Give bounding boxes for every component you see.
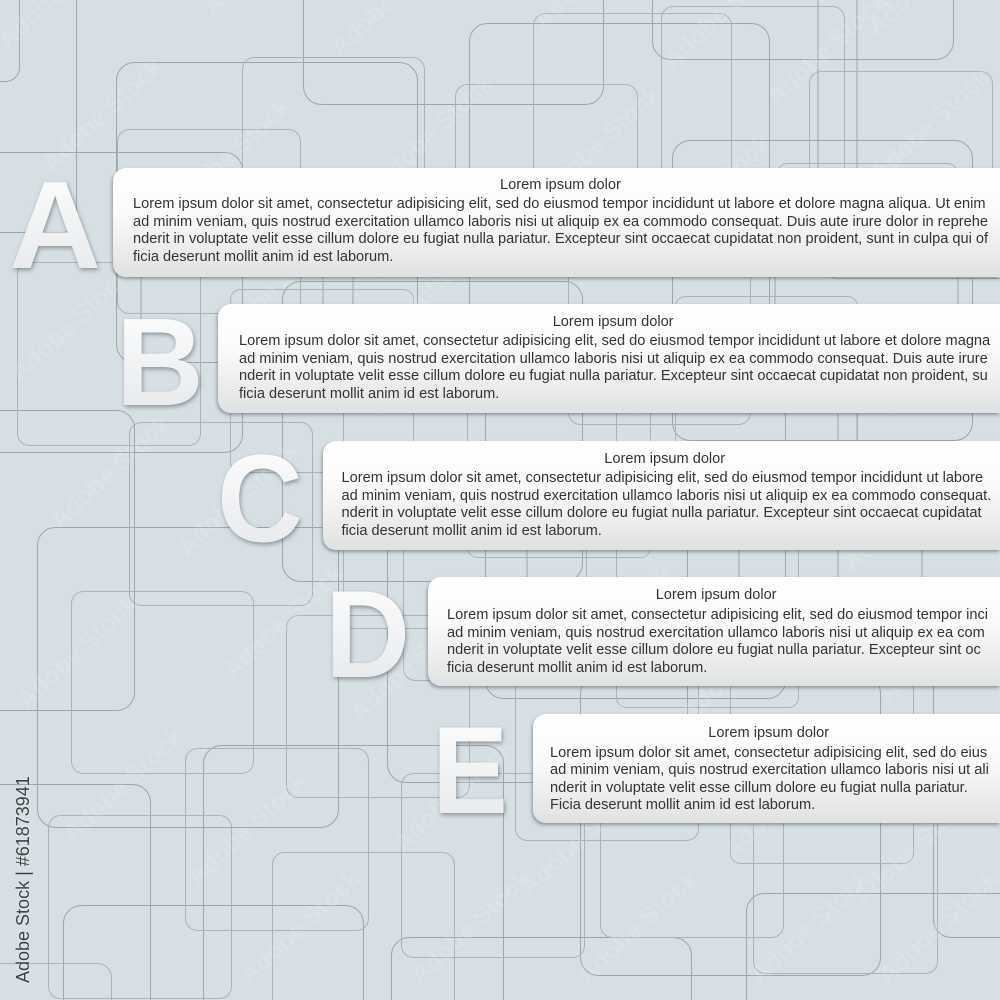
stock watermarks: Adobe Stock	[548, 563, 679, 687]
heading A: Lorem ipsum dolor	[500, 176, 621, 192]
text block A: Lorem ipsum dolor sit amet, consectetur adipisicing elit, sed do eiusmod tempor incididunt ut labore et dolore magna aliqua. Ut enim ad minim veniam, quis nostrud exercitation ullamco laboris nisi ut aliquip ex ea commodo consequat. Duis aute irure dolor in reprehe nderit in voluptate velit esse cillum dolore eu fugiat nulla pariatur. Excepteur sint occaecat cupidatat non proident, sunt in culpa qui of ficia deserunt mollit anim id est laborum.	[133, 196, 988, 265]
stock watermarks: Adobe Stock	[385, 210, 516, 334]
stock watermarks: Adobe Stock	[37, 53, 168, 177]
letter C: C	[217, 429, 303, 568]
panel: D	[428, 577, 1000, 686]
stock watermarks: Adobe Stock	[405, 865, 536, 989]
stock watermarks: Adobe Stock	[838, 453, 969, 577]
stock watermarks: Adobe Stock	[172, 437, 303, 561]
stock watermarks: Adobe Stock	[235, 865, 366, 989]
stock watermarks: Adobe Stock	[218, 560, 349, 684]
text block C: Lorem ipsum dolor sit amet, consectetur adipisicing elit, sed do eiusmod tempor incididunt ut labore ad minim veniam, quis nostrud exercitation ullamco laboris nisi ut aliquip ex ea commodo consequat. nderit in voluptate velit esse cillum dolore eu fugiat nulla pariatur. Excepteur sint occaecat cupidatat ficia deserunt mollit anim id est laborum.	[342, 470, 991, 539]
stock watermarks: Adobe Stock	[388, 733, 519, 857]
panel: A	[113, 168, 1000, 277]
stock watermarks: Adobe Stock	[12, 590, 143, 714]
panel: B	[218, 304, 1000, 413]
panel: C	[323, 441, 1000, 550]
heading E: Lorem ipsum dolor	[708, 725, 829, 741]
stock image id: Adobe Stock | #61873941	[13, 776, 33, 983]
stock watermarks: Adobe Stock	[345, 603, 476, 727]
letter E: E	[432, 702, 508, 840]
stock watermarks: Adobe Stock	[208, 227, 339, 351]
stock watermarks: Adobe Stock	[865, 63, 996, 187]
stock watermarks: Adobe Stock	[368, 70, 499, 194]
stock watermarks: Adobe Stock	[745, 865, 876, 989]
letter B: B	[116, 294, 204, 432]
stock watermarks: Adobe Stock	[675, 603, 806, 727]
heading D: Lorem ipsum dolor	[656, 587, 777, 603]
stock watermarks: Adobe Stock	[848, 787, 979, 911]
stock watermarks: Adobe Stock	[645, 130, 776, 254]
stock watermarks: Adobe Stock	[873, 865, 1000, 989]
stock watermarks: Adobe Stock	[515, 777, 646, 901]
heading C: Lorem ipsum dolor	[604, 451, 725, 467]
text block B: Lorem ipsum dolor sit amet, consectetur adipisicing elit, sed do eiusmod tempor incididunt ut labore et dolore magna ad minim veniam, quis nostrud exercitation ullamco laboris nisi ut aliquip ex ea commodo consequat. Duis aute irure nderit in voluptate velit esse cillum dolore eu fugiat nulla pariatur. Excepteur sint occaecat cupidatat non proident, su ficia deserunt mollit anim id est laborum.	[239, 333, 990, 402]
stock watermarks: Adobe Stock	[535, 80, 666, 204]
stock watermarks: Adobe Stock	[45, 410, 176, 534]
panel: E	[533, 714, 1000, 823]
stock watermarks: Adobe Stock	[165, 93, 296, 217]
stock watermarks: Adobe Stock	[58, 723, 189, 847]
letter A: A	[9, 156, 101, 295]
stock watermarks: Adobe Stock	[572, 865, 703, 989]
heading B: Lorem ipsum dolor	[553, 314, 674, 330]
stock watermarks: Adobe Stock	[718, 740, 849, 864]
stock watermarks: Adobe Stock	[5, 263, 136, 387]
stock watermarks: Adobe Stock	[873, 583, 1000, 707]
letter D: D	[325, 565, 410, 704]
text block D: Lorem ipsum dolor sit amet, consectetur adipisicing elit, sed do eiusmod tempor inci ad minim veniam, quis nostrud exercitation ullamco laboris nisi ut aliquip ex ea com nderit in voluptate velit esse cillum dolore eu fugiat nulla pariatur. Excepteur sint oc ficia deserunt mollit anim id est laborum.	[447, 607, 988, 676]
text block E: Lorem ipsum dolor sit amet, consectetur adipisicing elit, sed do eius ad minim veniam, quis nostrud exercitation ullamco laboris nisi ut ali nderit in voluptate velit esse cillum dolore eu fugiat nulla pariatur. Ficia deserunt mollit anim id est laborum.	[550, 744, 989, 813]
stock watermarks: Adobe Stock	[182, 767, 313, 891]
